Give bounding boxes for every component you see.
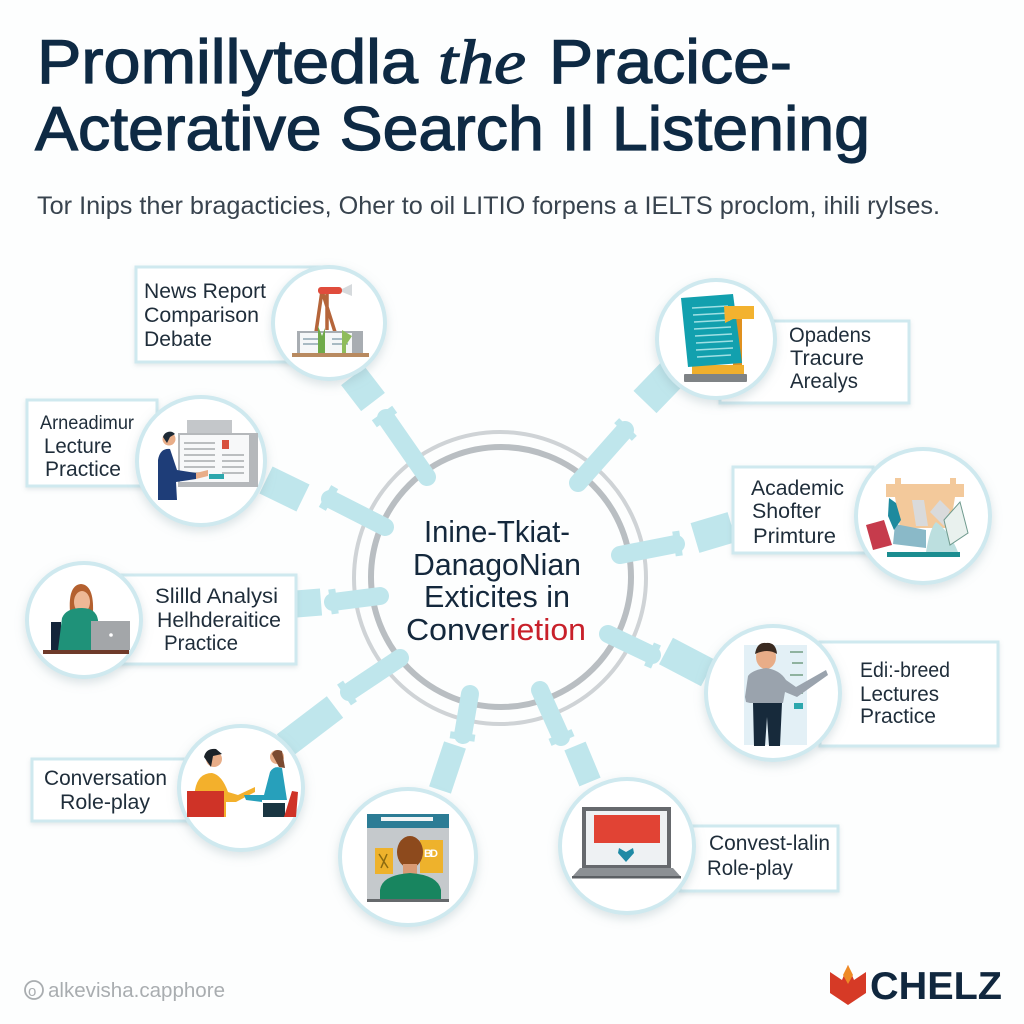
connectors bbox=[266, 373, 732, 790]
icon: academic building bbox=[866, 478, 968, 557]
label: Lectures bbox=[860, 683, 939, 706]
icon: document stack bbox=[681, 294, 754, 382]
footer url: o bbox=[28, 983, 36, 1000]
panel: skill analysis bbox=[27, 563, 296, 677]
label: Practice bbox=[860, 705, 936, 728]
logo: CHELZ bbox=[870, 965, 1002, 1008]
icon: presenter bbox=[744, 643, 828, 746]
label: Role-play bbox=[707, 857, 793, 880]
label: Arneadimur bbox=[40, 413, 135, 434]
icon: laptop bbox=[572, 807, 681, 878]
label: Role-play bbox=[60, 791, 150, 814]
label bbox=[860, 659, 950, 728]
label: Arealys bbox=[790, 370, 858, 393]
center text bbox=[406, 514, 586, 647]
label bbox=[155, 585, 281, 655]
panel: opadens tracure bbox=[657, 280, 909, 403]
central ring bbox=[354, 432, 646, 724]
panel: lecture practice bbox=[27, 397, 265, 525]
panel: conversation role-play bbox=[32, 726, 303, 850]
label: Primture bbox=[753, 525, 836, 548]
panel: edited lectures practice bbox=[706, 626, 998, 760]
label: Practice bbox=[45, 458, 121, 481]
label bbox=[40, 413, 135, 481]
title: Acterative Search Il Listening bbox=[35, 95, 870, 164]
panel: laptop role-play bbox=[560, 779, 838, 913]
label: Helhderaitice bbox=[157, 609, 281, 632]
label: News Report bbox=[144, 280, 266, 303]
title: Promillytedla bbox=[37, 28, 419, 97]
label: Academic bbox=[751, 477, 844, 500]
label: Slilld Analysi bbox=[155, 585, 278, 608]
label: Conversation bbox=[44, 767, 167, 790]
footer url: alkevisha.capphore bbox=[48, 980, 225, 1002]
panel: news report bbox=[136, 267, 385, 379]
center text: Exticites in bbox=[424, 579, 570, 614]
label: Practice bbox=[164, 632, 238, 655]
label: Shofter bbox=[752, 500, 821, 523]
center text: Inine-Tkiat- bbox=[424, 514, 570, 549]
title: Pracice- bbox=[549, 28, 792, 97]
label: Opadens bbox=[789, 324, 871, 347]
label: Convest-lalin bbox=[709, 832, 830, 855]
icon: lecturer and board bbox=[158, 420, 258, 500]
label: Lecture bbox=[44, 435, 112, 458]
label: Tracure bbox=[790, 347, 864, 370]
icon: viewer at screen: BD bbox=[424, 848, 438, 860]
panel: person with video screen bbox=[340, 789, 476, 925]
label: Debate bbox=[144, 328, 212, 351]
label bbox=[751, 477, 844, 548]
icon: woman at laptop bbox=[43, 584, 130, 654]
label bbox=[44, 767, 167, 814]
label bbox=[144, 280, 266, 351]
icon: megaphone on desk bbox=[292, 284, 369, 357]
label: Edi:-breed bbox=[860, 659, 950, 682]
icon: two people talking bbox=[187, 749, 298, 817]
center text: DanagoNian bbox=[413, 547, 581, 582]
label bbox=[789, 324, 871, 393]
label bbox=[707, 832, 830, 880]
center text: Converietion bbox=[406, 612, 586, 647]
panel: academic shofter primture bbox=[733, 449, 990, 583]
subtitle: Tor Inips ther bragacticies, Oher to oil LITIO forpens a IELTS proclom, ihili rylses. bbox=[37, 192, 940, 220]
label: Comparison bbox=[144, 304, 259, 327]
title: the bbox=[438, 29, 526, 97]
title bbox=[35, 28, 870, 164]
